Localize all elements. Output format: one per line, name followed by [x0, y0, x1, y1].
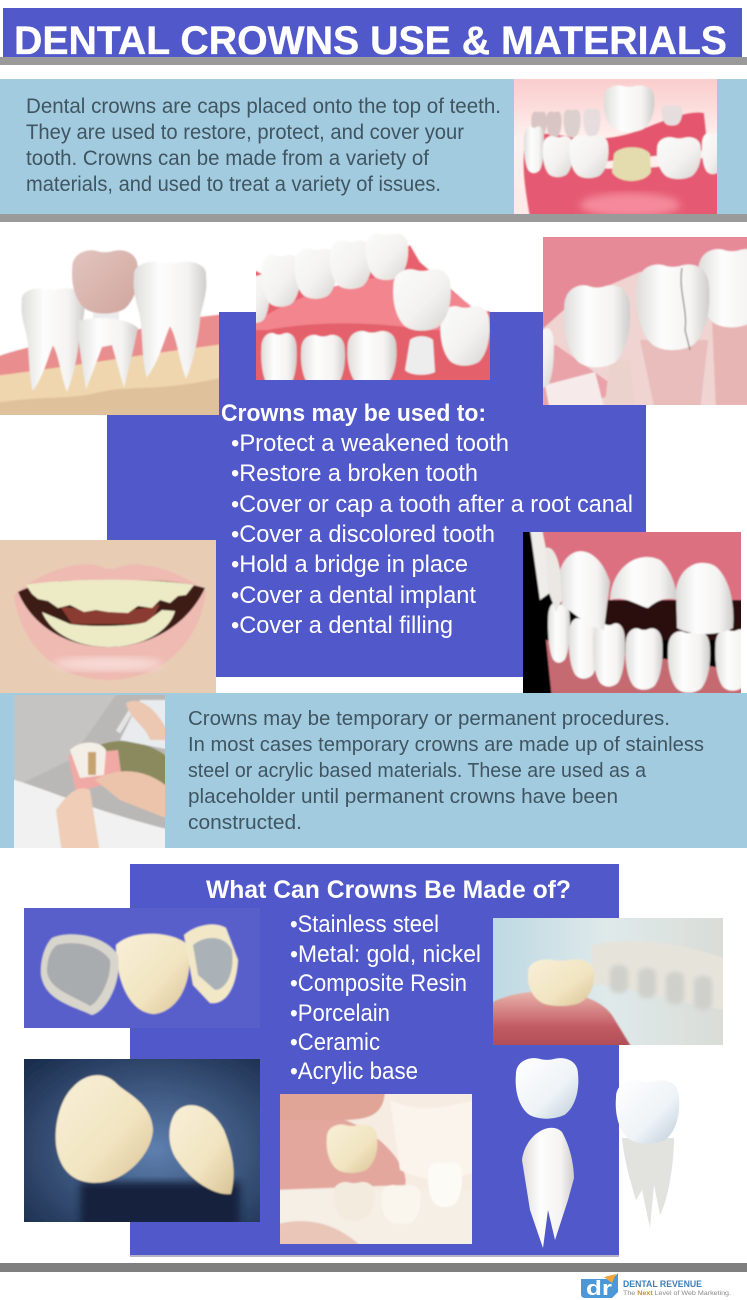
logo: Dental Revenue	[581, 1273, 731, 1300]
image: crown on fingertip	[493, 918, 723, 1045]
image: smile with crooked teeth	[0, 534, 222, 699]
list items: •Cover a dental implant	[231, 582, 476, 609]
intro text: tooth. Crowns can be made from a variety of	[26, 147, 429, 170]
logo icon: dr	[586, 1278, 612, 1300]
image: metal-backed bridge	[24, 908, 240, 1028]
panel heading: What Can Crowns Be Made of?	[206, 876, 571, 904]
image: porcelain crowns on navy	[24, 1059, 260, 1222]
list items: •Cover a discolored tooth	[231, 521, 495, 548]
panel: temporary or permanent crowns	[0, 689, 747, 854]
logo icon	[581, 1273, 618, 1300]
title banner	[0, 8, 747, 65]
materials list: •Composite Resin	[290, 970, 467, 997]
materials list: •Stainless steel	[290, 911, 439, 938]
list items: •Cover a dental filling	[231, 612, 453, 639]
image: prepared tooth with roots	[522, 1128, 574, 1248]
temporary crowns text	[188, 708, 704, 834]
materials list: •Porcelain	[290, 1000, 390, 1027]
panel: crowns may be used to	[0, 224, 747, 699]
image: crown on lower jaw model	[280, 1094, 472, 1244]
intro text: They are used to restore, protect, and cover your	[26, 121, 464, 144]
intro text	[26, 95, 501, 196]
image: whole tooth with crown	[616, 1080, 679, 1228]
intro text: Dental crowns are caps placed onto the top of teeth.	[26, 95, 501, 118]
list items: •Protect a weakened tooth	[231, 430, 509, 457]
list items: •Hold a bridge in place	[231, 551, 468, 578]
image: chipped front tooth	[523, 532, 741, 693]
logo: Dental Revenue: DENTAL REVENUE	[623, 1279, 702, 1289]
title text: DENTAL CROWNS USE & MATERIALS	[14, 19, 727, 63]
footer bar	[0, 1263, 747, 1272]
intro text: materials, and used to treat a variety of issues.	[26, 173, 441, 196]
temporary crowns text: In most cases temporary crowns are made up of stainless	[188, 734, 704, 756]
list items: •Restore a broken tooth	[231, 460, 478, 487]
image: crown over lower jaw post	[256, 234, 490, 380]
panel: what can crowns be made of	[18, 864, 729, 1257]
list items	[231, 430, 633, 639]
materials list	[290, 911, 481, 1085]
panel: introduction	[0, 73, 747, 222]
list: crown uses	[221, 400, 633, 639]
temporary crowns text: placeholder until permanent crowns have been	[188, 786, 618, 808]
materials list: •Acrylic base	[290, 1058, 418, 1085]
image: dentist showing dental model	[14, 695, 165, 848]
image: cracked tooth	[543, 237, 747, 405]
logo: Dental Revenue: The Next Level of Web Marketing.	[623, 1290, 731, 1297]
teeth	[26, 580, 194, 647]
list heading: Crowns may be used to:	[221, 400, 486, 427]
image: bridge on implant cross-section	[0, 250, 219, 415]
temporary crowns text: constructed.	[188, 812, 302, 834]
image: crown above prepared tooth	[514, 79, 717, 214]
materials list: •Metal: gold, nickel	[290, 941, 481, 968]
temporary crowns text: steel or acrylic based materials. These are used as a	[188, 760, 647, 782]
list items: •Cover or cap a tooth after a root canal	[231, 491, 633, 518]
temporary crowns text: Crowns may be temporary or permanent procedures.	[188, 708, 670, 730]
materials list: •Ceramic	[290, 1029, 380, 1056]
image: white crown	[516, 1058, 578, 1119]
